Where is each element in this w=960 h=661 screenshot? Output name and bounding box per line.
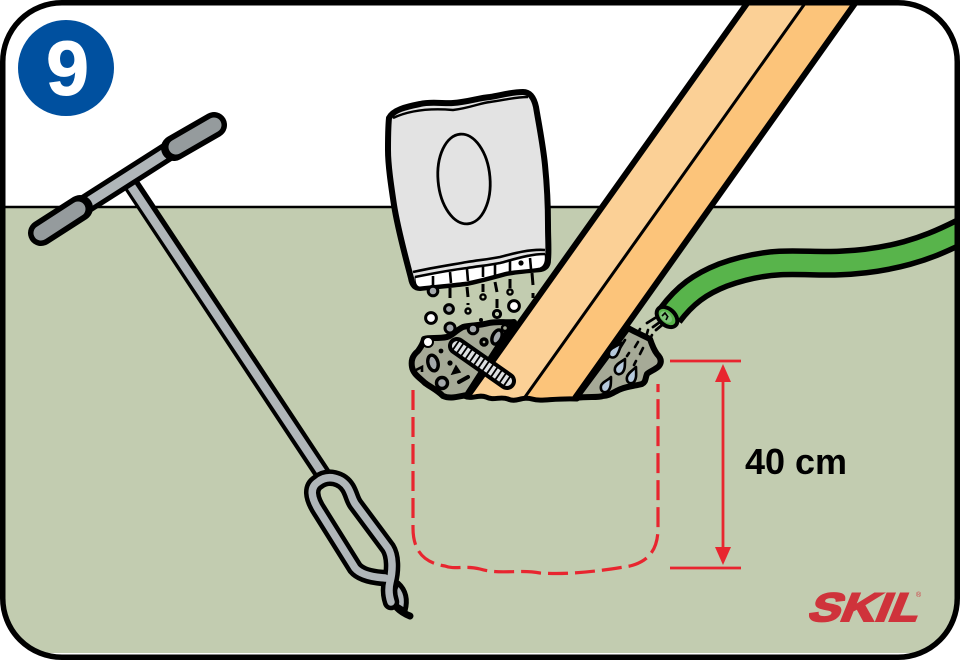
auger handle xyxy=(41,125,214,233)
concrete stones xyxy=(416,325,508,388)
brand logo: SKIL: SKIL xyxy=(803,584,931,630)
bag label oval xyxy=(434,132,494,226)
cement bag xyxy=(388,92,548,288)
water spray xyxy=(647,318,662,330)
panel: ground xyxy=(0,207,960,653)
depth guide: dashed hole outline xyxy=(413,384,658,574)
water drops xyxy=(601,343,636,392)
auger bit loop xyxy=(312,478,410,616)
brand logo: SKIL: ® xyxy=(916,591,922,599)
tool: T-handle soil auger xyxy=(41,125,410,616)
auger shaft xyxy=(131,184,324,476)
dimension label: 40 cm xyxy=(745,441,847,482)
concrete mound left xyxy=(412,322,514,398)
step number badge: 9 xyxy=(46,26,89,112)
concrete mound right xyxy=(576,328,661,398)
anchor bolt xyxy=(455,345,509,382)
dimension: 40 cm xyxy=(670,361,847,568)
falling cement particles xyxy=(423,273,533,347)
garden hose xyxy=(647,231,960,331)
water streaks xyxy=(620,329,652,365)
step number badge xyxy=(18,20,114,116)
bag open bottom xyxy=(413,250,545,287)
hole bottom edge xyxy=(464,396,577,400)
bag top seam xyxy=(393,97,528,118)
hose nozzle xyxy=(653,303,681,331)
wooden post xyxy=(467,2,856,398)
